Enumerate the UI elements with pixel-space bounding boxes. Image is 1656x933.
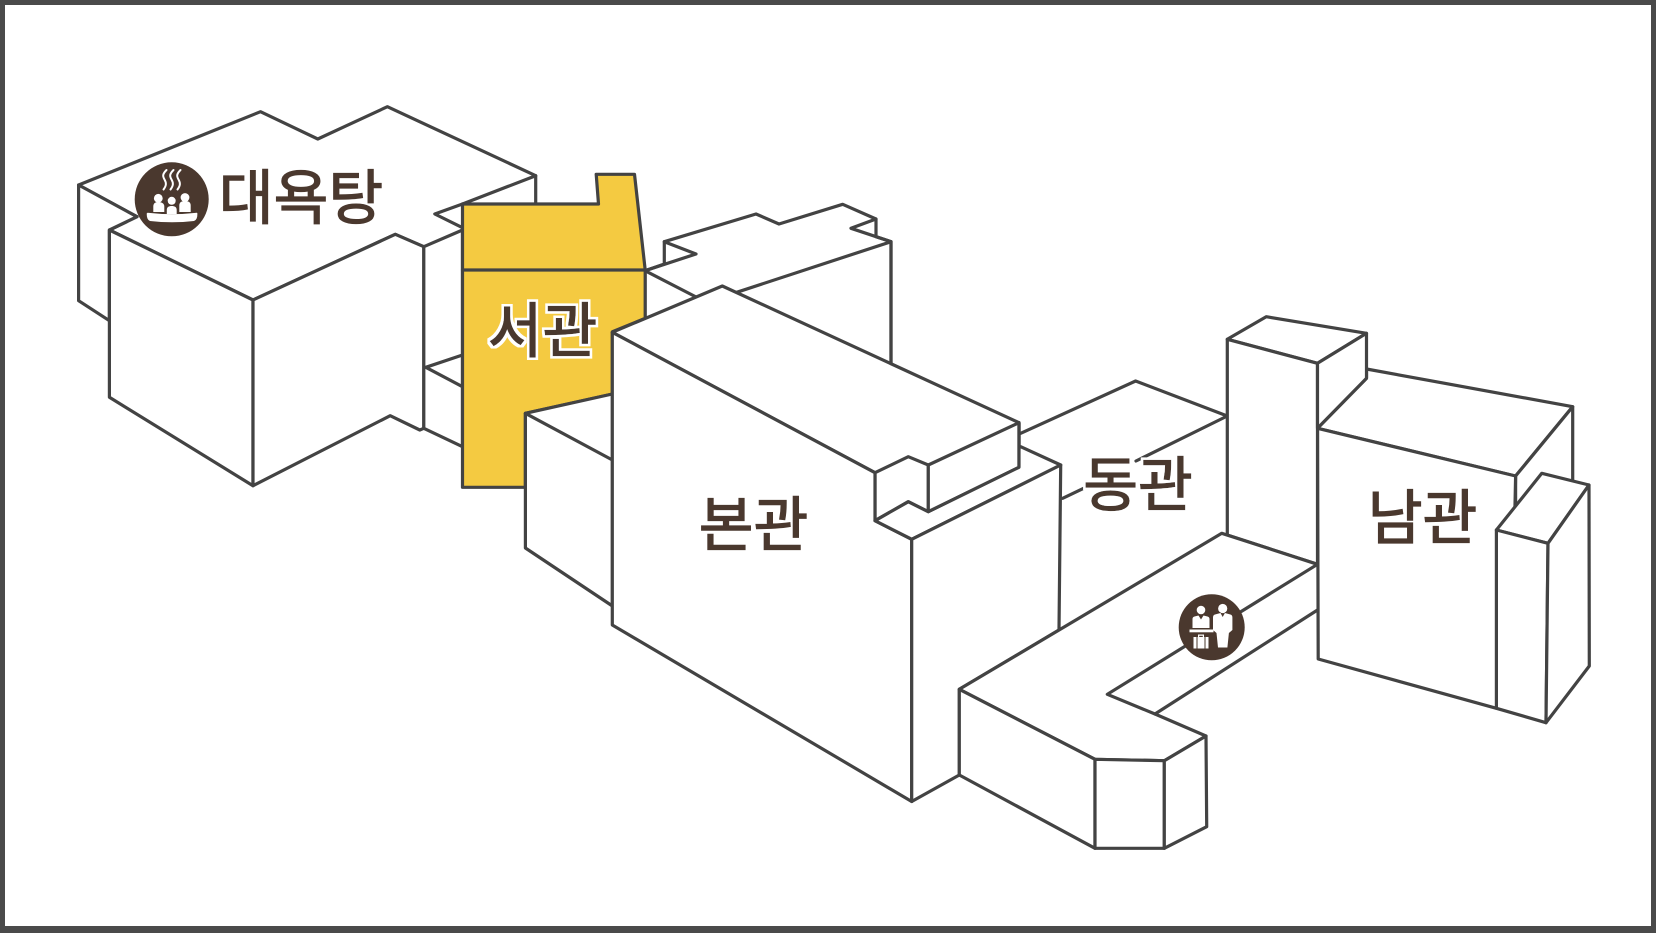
building: 본관 <box>612 286 1061 802</box>
icon: front desk <box>1179 594 1245 660</box>
label: 동관: 동관 <box>1083 452 1193 519</box>
building: entrance wing <box>959 533 1318 848</box>
building: 남관 front wing <box>1496 473 1589 723</box>
icon: bathers <box>153 193 191 214</box>
label: 남관: 남관 <box>1368 485 1477 552</box>
building: 본관 low wing <box>525 394 612 606</box>
icon: public bath <box>135 162 209 236</box>
label: 대욕탕: 대욕탕 <box>219 165 383 232</box>
label: 서관: 서관 <box>488 298 597 365</box>
icon: steam <box>163 170 180 190</box>
icon: tub <box>147 213 197 222</box>
label: 본관: 본관 <box>699 492 808 559</box>
building: 대욕탕 <box>79 107 536 486</box>
building: 남관 tower <box>1227 317 1366 564</box>
building: 동관 <box>1021 381 1227 628</box>
building: back wing behind 본관 <box>645 204 891 400</box>
building: 서관 (highlighted) <box>462 174 645 487</box>
building: 남관 <box>1318 369 1573 708</box>
